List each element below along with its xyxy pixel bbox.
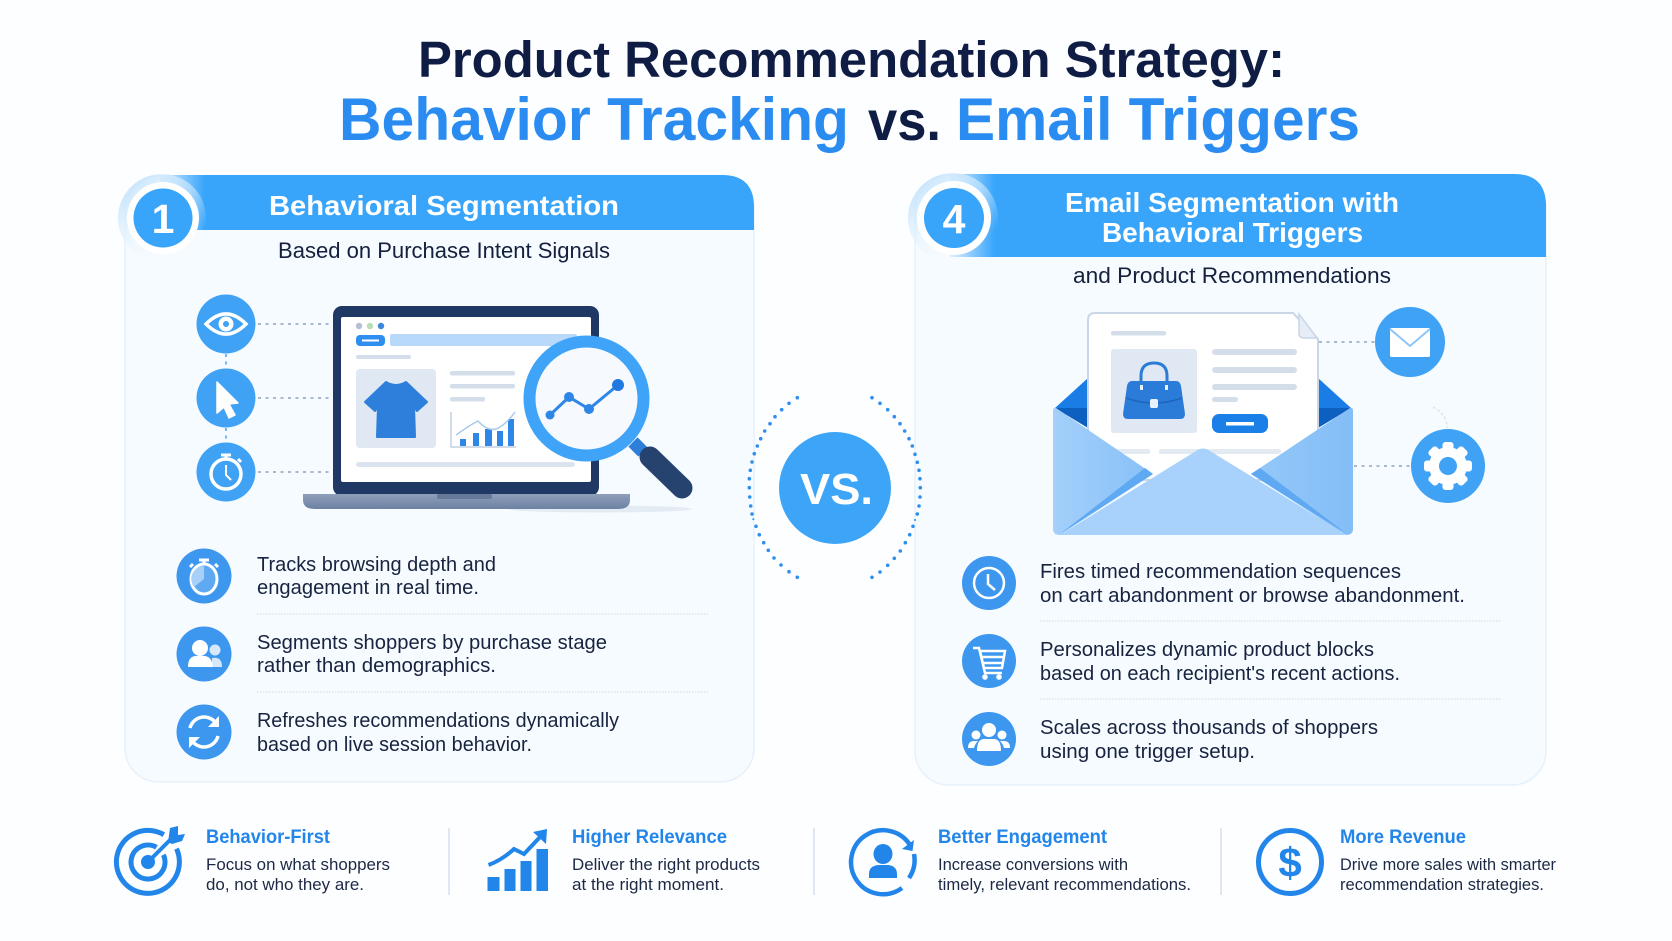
envelope flaps bbox=[1053, 408, 1153, 535]
bullet: live refresh bbox=[176, 704, 619, 760]
benefit: better engagement: Better Engagement bbox=[938, 827, 1108, 848]
benefit: behavior-first bbox=[116, 826, 390, 894]
badge: number 1 bbox=[118, 174, 206, 262]
vs badge: VS. bbox=[800, 465, 873, 514]
benefit: behavior-first: Behavior-First bbox=[206, 827, 331, 848]
envelope back corners bbox=[1055, 378, 1088, 408]
benefit: better engagement: Increase conversions with bbox=[938, 855, 1128, 874]
benefit: higher relevance bbox=[488, 827, 760, 894]
bullet: purchase stage bbox=[176, 626, 607, 682]
bullet: browsing depth: Tracks browsing depth and bbox=[257, 554, 496, 576]
icon: stopwatch bbox=[196, 442, 256, 502]
panel heading bbox=[1065, 187, 1399, 248]
icon: eye bbox=[196, 294, 256, 354]
benefit: more revenue: recommendation strategies. bbox=[1340, 875, 1544, 894]
benefit: higher relevance: Deliver the right products bbox=[572, 855, 760, 874]
laptop screen bbox=[341, 317, 591, 482]
panel header bbox=[950, 174, 1546, 257]
magnifying glass bbox=[530, 342, 682, 488]
bullet: scale: Scales across thousands of shoppers bbox=[1040, 717, 1378, 739]
panel heading: Behavioral Triggers bbox=[1102, 217, 1363, 248]
icon: target bbox=[116, 826, 185, 893]
panel header bbox=[160, 175, 754, 230]
title bbox=[339, 31, 1360, 153]
panel heading: Email Segmentation with bbox=[1065, 187, 1399, 218]
bullet: timed sequences: on cart abandonment or browse abandonment. bbox=[1040, 585, 1465, 607]
mini bar chart bbox=[451, 412, 516, 447]
benefit: better engagement: timely, relevant recommendations. bbox=[938, 875, 1191, 894]
dotted arcs bbox=[748, 396, 922, 579]
bullet: live refresh: based on live session behavior. bbox=[257, 734, 532, 756]
title: Behavior Tracking bbox=[339, 86, 849, 153]
icon: dollar coin bbox=[1258, 830, 1322, 894]
benefit: more revenue bbox=[1258, 827, 1556, 894]
vs badge bbox=[748, 396, 922, 579]
benefit: more revenue: More Revenue bbox=[1340, 827, 1466, 848]
screen content bbox=[356, 323, 577, 467]
panel heading: Behavioral Segmentation bbox=[269, 190, 619, 221]
bullet: timed sequences bbox=[962, 556, 1465, 610]
laptop illustration bbox=[303, 306, 692, 512]
bullet: scale bbox=[962, 712, 1378, 766]
benefit: better engagement bbox=[851, 827, 1191, 894]
icon: stopwatch bbox=[176, 548, 232, 604]
badge: number 4 bbox=[908, 173, 998, 263]
connector lines bbox=[1319, 342, 1410, 466]
benefit: higher relevance: at the right moment. bbox=[572, 875, 724, 894]
benefit: more revenue: Drive more sales with smarter bbox=[1340, 855, 1556, 874]
title: Product Recommendation Strategy: bbox=[418, 31, 1285, 88]
icon: mail bbox=[1375, 307, 1445, 377]
handbag bbox=[1123, 363, 1185, 419]
panel: email segmentation bbox=[908, 173, 1546, 785]
badge: number 4: 4 bbox=[943, 196, 966, 242]
bullet: dynamic blocks: based on each recipient's recent actions. bbox=[1040, 663, 1400, 685]
icon: gear bbox=[1411, 429, 1485, 503]
icon: person cycle bbox=[851, 830, 915, 894]
bullet: browsing depth: engagement in real time. bbox=[257, 577, 479, 599]
benefit: higher relevance: Higher Relevance bbox=[572, 827, 727, 848]
laptop lid bbox=[333, 306, 599, 496]
email document bbox=[1088, 313, 1318, 480]
bullet: dynamic blocks: Personalizes dynamic product blocks bbox=[1040, 639, 1374, 661]
laptop base bbox=[303, 494, 630, 509]
panel: behavioral segmentation bbox=[118, 174, 754, 782]
title: vs. bbox=[868, 89, 941, 152]
open envelope illustration bbox=[1053, 313, 1353, 535]
benefit: behavior-first: do, not who they are. bbox=[206, 875, 364, 894]
bullet: browsing depth bbox=[176, 548, 496, 604]
bullet: dynamic blocks bbox=[962, 634, 1400, 688]
bullet: purchase stage: Segments shoppers by purchase stage bbox=[257, 632, 607, 654]
icon: dollar coin: $ bbox=[1278, 839, 1302, 886]
icon: clock bbox=[962, 556, 1016, 610]
bullet: scale: using one trigger setup. bbox=[1040, 741, 1255, 763]
connector lines bbox=[226, 324, 332, 472]
badge: number 1: 1 bbox=[152, 196, 174, 242]
t-shirt bbox=[365, 382, 427, 437]
title: Email Triggers bbox=[956, 86, 1360, 153]
lens trend line bbox=[546, 379, 624, 420]
icon: shoppers bbox=[176, 626, 232, 682]
icon: cart bbox=[962, 634, 1016, 688]
icon: cursor bbox=[196, 368, 256, 428]
benefit: behavior-first: Focus on what shoppers bbox=[206, 855, 390, 874]
panel subtitle: and Product Recommendations bbox=[1073, 263, 1391, 288]
bullet: live refresh: Refreshes recommendations dynamically bbox=[257, 710, 619, 732]
bullet: timed sequences: Fires timed recommendation sequences bbox=[1040, 561, 1401, 583]
call-to-action button bbox=[1212, 414, 1268, 433]
icon: growth bars bbox=[488, 829, 548, 891]
panel subtitle: Based on Purchase Intent Signals bbox=[278, 238, 610, 263]
bullet: purchase stage: rather than demographics. bbox=[257, 655, 496, 677]
icon: refresh bbox=[176, 704, 232, 760]
icon: group bbox=[962, 712, 1016, 766]
